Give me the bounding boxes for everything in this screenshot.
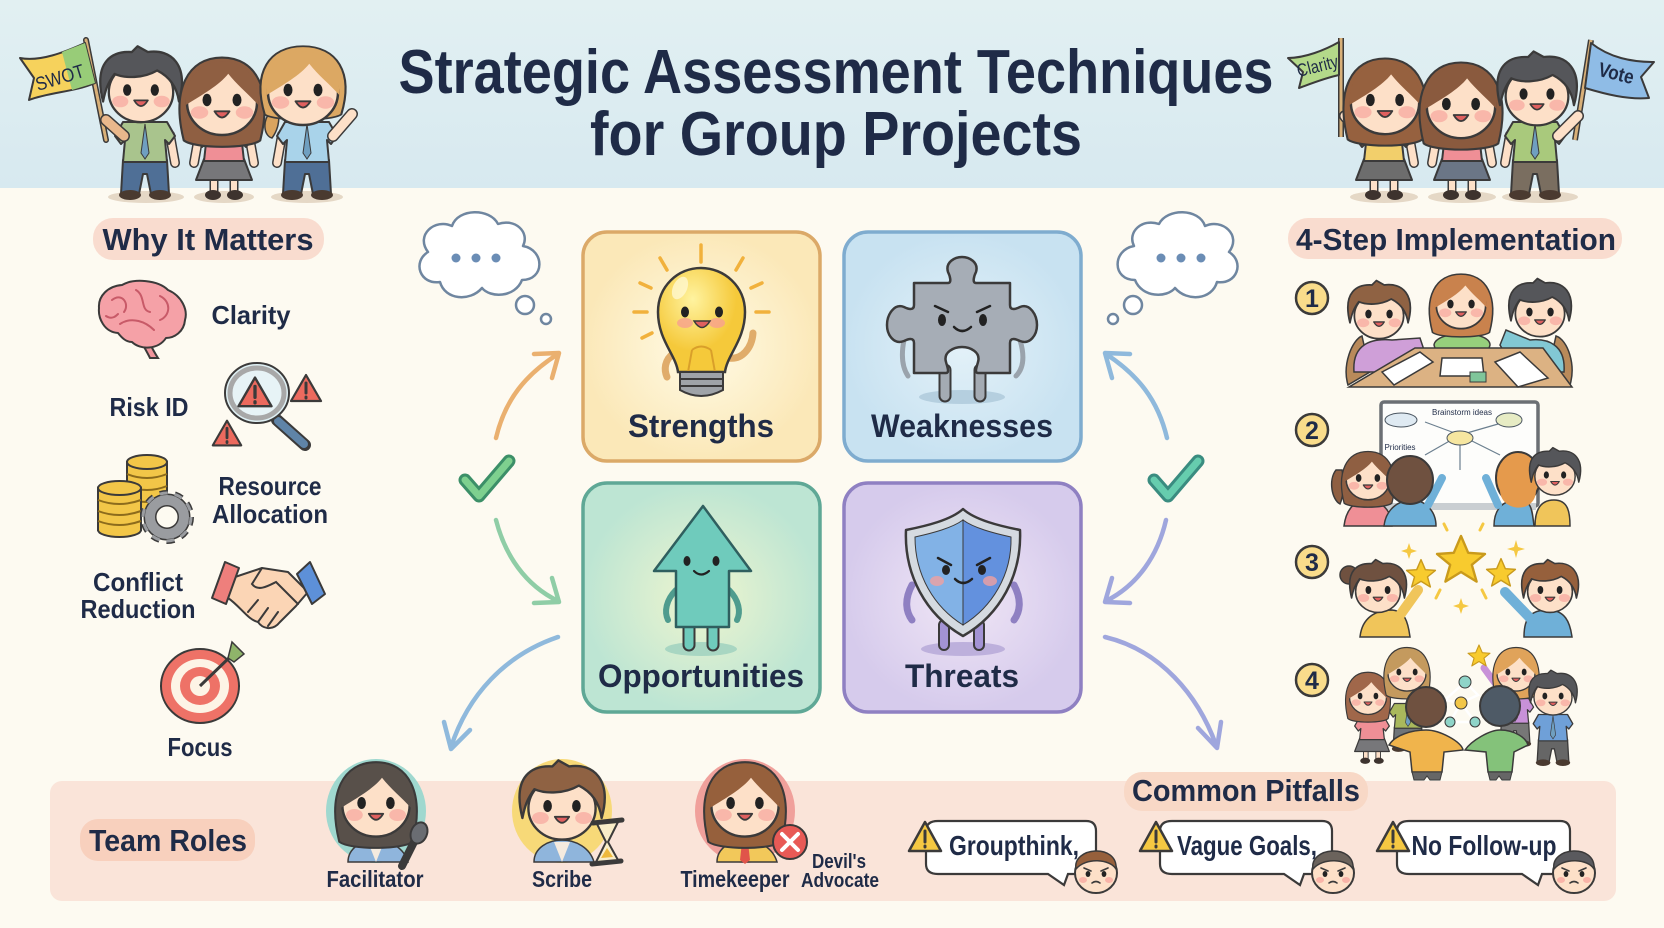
- number badge 1: [1296, 282, 1328, 314]
- pitfall: No Follow-up: [1377, 821, 1595, 893]
- benefit: Resource Allocation: Allocation: [212, 499, 328, 529]
- arrow: orange to Strengths: [496, 353, 559, 438]
- panel: Opportunities: [583, 483, 820, 712]
- role: Devil's Advocate: Advocate: [801, 870, 879, 892]
- benefit: Risk ID: Risk ID: [110, 392, 188, 422]
- Clarity flag: [1288, 38, 1341, 137]
- heading: Why It Matters: Why It Matters: [102, 222, 314, 257]
- title: [398, 38, 1274, 169]
- benefit: Focus: Focus: [168, 732, 232, 762]
- panel: Weaknesses: Weaknesses: [871, 408, 1053, 444]
- step 2: team at whiteboard: [1296, 402, 1581, 526]
- role: Scribe: Scribe: [532, 866, 592, 892]
- step 2: team at whiteboard: Priorities: [1384, 443, 1416, 452]
- icon: hourglass: [592, 820, 622, 864]
- role: Facilitator: [326, 759, 431, 892]
- SWOT flag: SWOT: [33, 61, 87, 96]
- arrow: blue to Weaknesses: [1105, 353, 1167, 438]
- icon: handshake: [212, 562, 325, 628]
- benefit: Risk ID: [110, 363, 321, 445]
- panel: Opportunities: Opportunities: [598, 658, 804, 694]
- panel: Threats: Threats: [905, 658, 1019, 694]
- arrow: purple to Threats: [1105, 520, 1166, 603]
- icon: arrow character: [654, 506, 751, 656]
- header group: left students with SWOT flag: [20, 40, 352, 203]
- step 2: team at whiteboard: Brainstorm ideas: [1432, 408, 1492, 417]
- thought cloud right: [1108, 212, 1238, 324]
- number badge 2: [1296, 414, 1328, 446]
- benefit: Conflict Reduction: Reduction: [80, 594, 196, 624]
- icon: microphone: [402, 820, 431, 866]
- icon: target with arrow: [160, 642, 244, 723]
- number badge 1: 1: [1305, 285, 1319, 313]
- role: Facilitator: Facilitator: [326, 866, 424, 892]
- benefit: Clarity: Clarity: [212, 300, 291, 330]
- role: Devil's Advocate: [801, 851, 879, 892]
- benefit: Clarity: [99, 281, 291, 358]
- Clarity flag: Clarity: [1295, 51, 1340, 81]
- title: for Group Projects: [590, 100, 1082, 169]
- benefit: Conflict Reduction: [80, 562, 325, 628]
- arrow: green to Opportunities: [496, 520, 559, 603]
- icon: shield character: [906, 509, 1020, 656]
- step 3: team reaching for stars: [1296, 524, 1578, 637]
- role: Timekeeper: [680, 759, 807, 892]
- header group: right students with Clarity and Vote flags: [1288, 38, 1654, 203]
- icon: smiling light bulb: [634, 245, 769, 396]
- icon: magnifier with warnings: [213, 363, 321, 445]
- pitfall: No Follow-up: No Follow-up: [1412, 830, 1556, 861]
- step 4: team in a circle: [1296, 645, 1577, 780]
- thought cloud left: [419, 212, 551, 324]
- panel: Strengths: [583, 232, 820, 461]
- icon: check right: [1154, 461, 1198, 496]
- heading: Common Pitfalls: Common Pitfalls: [1132, 773, 1360, 808]
- Vote flag: Vote: [1596, 59, 1636, 89]
- icon: coins and gear: [98, 455, 191, 541]
- title: Strategic Assessment Techniques: [398, 38, 1274, 107]
- benefit: Focus: [160, 642, 244, 762]
- panel: Weaknesses: [844, 232, 1081, 461]
- number badge 2: 2: [1305, 417, 1319, 445]
- panel: Threats: [844, 483, 1081, 712]
- benefit: Resource Allocation: [98, 455, 328, 541]
- pitfall: Vague Goals: Vague Goals,: [1177, 830, 1317, 861]
- pitfall: Groupthink: [909, 821, 1117, 893]
- panel: bottom band with team roles and pitfalls: [50, 781, 1616, 901]
- panel: Strengths: Strengths: [628, 408, 774, 444]
- pitfall: Vague Goals: [1140, 821, 1354, 893]
- role: Scribe: [512, 759, 622, 892]
- icon: puzzle piece character: [887, 257, 1037, 404]
- benefit: Resource Allocation: Resource: [218, 471, 322, 501]
- icon: check left: [465, 461, 509, 496]
- pitfall: Groupthink: Groupthink,: [949, 830, 1079, 861]
- heading: Team Roles: Team Roles: [89, 823, 247, 858]
- arrow: periwinkle down to Common Pitfalls: [1105, 637, 1221, 748]
- icon: red cross badge: [773, 825, 807, 859]
- step 1: team at table: [1296, 274, 1572, 387]
- number badge 3: 3: [1305, 549, 1319, 577]
- heading: 4-Step Implementation: 4-Step Implementation: [1296, 222, 1616, 257]
- icon: brain: [99, 281, 186, 358]
- arrow: blue down to Team Roles: [444, 637, 558, 749]
- SWOT flag: [20, 40, 106, 140]
- number badge 4: 4: [1305, 667, 1319, 695]
- role: Timekeeper: Timekeeper: [680, 866, 790, 892]
- Vote flag: [1575, 40, 1654, 140]
- number badge 4: [1296, 664, 1328, 696]
- header band: [0, 0, 1664, 188]
- benefit: Conflict Reduction: Conflict: [93, 567, 183, 597]
- role: Devil's Advocate: Devil's: [812, 851, 866, 873]
- number badge 3: [1296, 546, 1328, 578]
